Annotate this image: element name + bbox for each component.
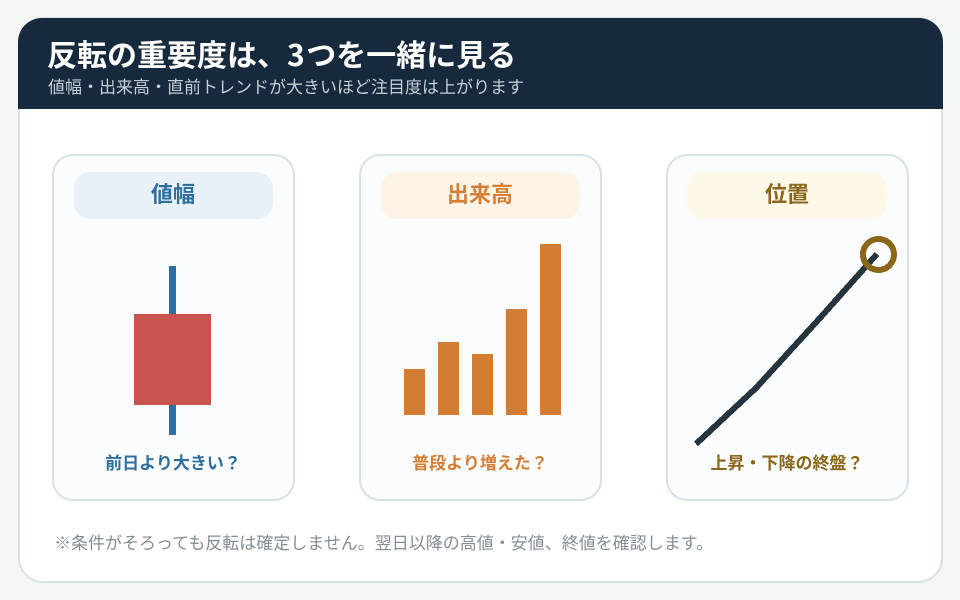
heading pill: 位置: 位置 <box>765 177 809 209</box>
caption: 出来高: 普段より増えた？ <box>412 449 548 474</box>
title: 反転の重要度は、3つを一緒に見る <box>47 31 516 75</box>
heading pill: 出来高 <box>381 172 580 219</box>
icon: candlestick <box>134 266 211 435</box>
panel: 出来高 <box>360 155 601 500</box>
panel: 位置 <box>667 155 908 500</box>
heading pill: 位置 <box>687 172 887 219</box>
chart: trend line with marker <box>696 239 894 444</box>
caption: 値幅: 前日より大きい？ <box>105 449 241 474</box>
panel: 値幅 <box>53 155 294 500</box>
bar chart: volume <box>404 244 561 415</box>
heading pill: 値幅: 値幅 <box>151 177 195 209</box>
caption: 位置: 上昇・下降の終盤？ <box>710 449 864 474</box>
subtitle: 値幅・出来高・直前トレンドが大きいほど注目度は上がります <box>48 73 524 98</box>
header band <box>18 18 943 109</box>
heading pill: 出来高: 出来高 <box>447 177 513 209</box>
footnote: ※条件がそろっても反転は確定しません。翌日以降の高値・安値、終値を確認します。 <box>54 529 713 554</box>
heading pill: 値幅 <box>74 172 273 219</box>
